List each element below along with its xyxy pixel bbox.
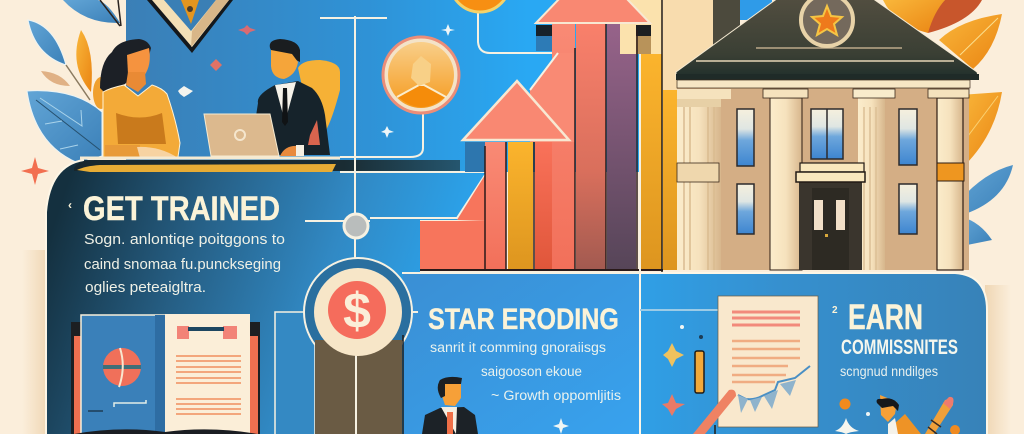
columns <box>677 89 969 270</box>
text block: start enrolling body: sanrit it comming gnoraiisgs <box>430 340 606 355</box>
heading: start enrolling: STAR ERODING <box>428 303 619 336</box>
entablature <box>677 80 970 88</box>
bar chart: growth arrows <box>420 0 663 272</box>
heading: earn: EARN <box>848 298 923 337</box>
desk band <box>74 158 460 172</box>
roof <box>676 0 979 79</box>
heading: commissions: COMMISSNITES <box>841 336 958 359</box>
ball <box>103 348 141 386</box>
icon: dollar coin with frame: $ <box>343 283 371 339</box>
icon: person coin <box>383 37 459 113</box>
page lines <box>176 356 241 414</box>
left foliage <box>21 0 121 185</box>
icon: gold bar <box>695 351 704 393</box>
small arrow head <box>463 81 569 140</box>
panel: earn commissions <box>640 273 987 434</box>
text block: earn body: scngnud nndilges <box>840 363 938 379</box>
figure: man with pencil <box>835 395 960 434</box>
chair <box>298 60 340 130</box>
emblem <box>801 0 853 46</box>
figure: businessman <box>422 377 569 434</box>
connector line in earn panel <box>640 309 718 311</box>
icon: top coin <box>450 0 510 12</box>
door <box>796 163 865 270</box>
icon: document with chart <box>718 296 818 427</box>
building surround <box>662 0 772 272</box>
icon: small mark: ‹ <box>68 198 72 212</box>
icon: open book <box>71 314 260 434</box>
large arrow head <box>536 0 650 23</box>
icon: shield <box>147 0 233 53</box>
heading: get trained: GET TRAINED <box>83 190 280 228</box>
panel: get trained <box>46 160 487 434</box>
text block: get trained body: caind snomaa fu.punckseging <box>84 256 281 273</box>
icon: pen <box>693 390 736 434</box>
decorative sparkles in top panel <box>178 24 455 138</box>
text block: get trained body: oglies peteaigltra. <box>85 279 206 296</box>
text block: get trained body <box>84 231 285 296</box>
icon: dollar coin with frame <box>275 258 418 434</box>
building <box>676 0 979 270</box>
figure: woman <box>100 39 180 158</box>
icon: small mark earn: 2 <box>832 305 838 316</box>
windows <box>737 109 917 234</box>
panel: top blue background <box>126 0 662 220</box>
icon: red sparkle <box>21 157 49 185</box>
text block: get trained body: Sogn. anlontiqe poitggons to <box>84 231 285 248</box>
text block: start enrolling body: ~ Growth oppomljitis <box>491 388 621 403</box>
panel: start enrolling <box>403 273 640 434</box>
right foliage <box>883 0 1013 246</box>
text block: start enrolling body <box>430 340 621 403</box>
node circle <box>344 214 368 238</box>
text block: start enrolling body: saigooson ekoue <box>481 364 582 379</box>
sparkles <box>662 325 703 416</box>
connector lines <box>305 12 573 260</box>
facade <box>677 80 969 270</box>
laptop <box>204 114 279 156</box>
figure: man with chair <box>204 39 340 156</box>
page tab <box>177 326 189 339</box>
